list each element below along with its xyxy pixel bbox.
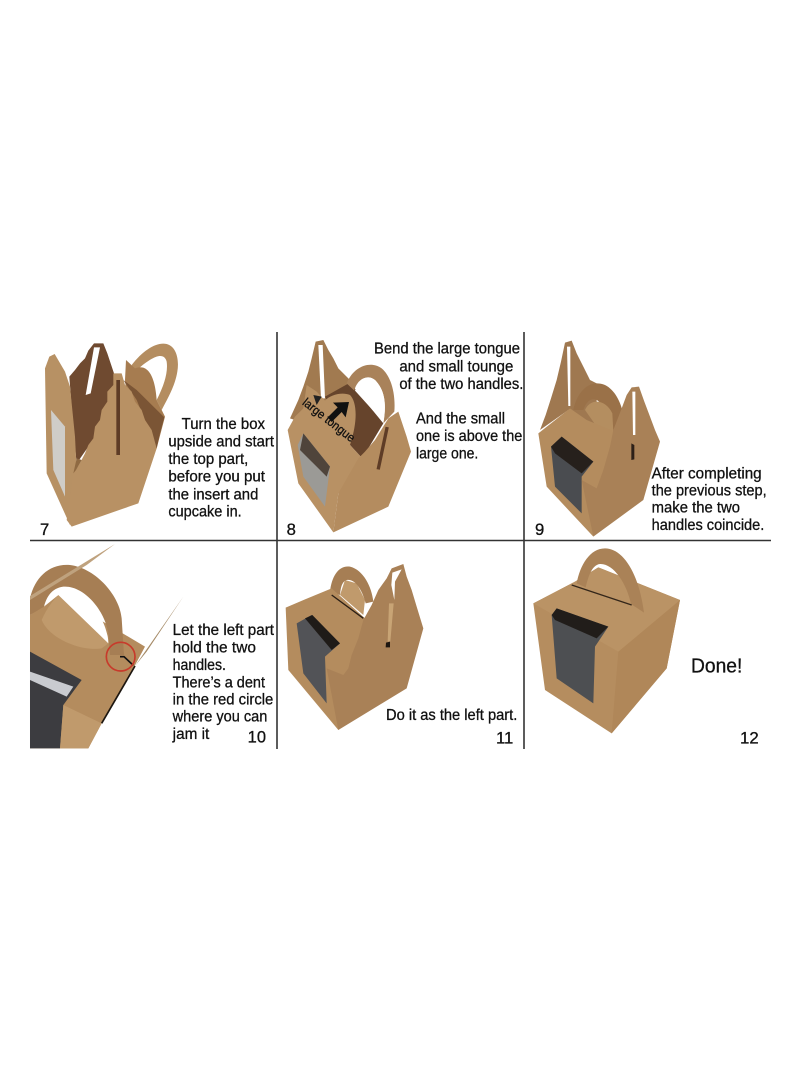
red circle highlighting the dent — [106, 642, 135, 671]
box illustration: step 8 — [288, 340, 411, 532]
box illustration: step 12 — [533, 548, 680, 733]
caption: step 8: one is above the — [416, 428, 523, 445]
caption: step 8: and small tounge — [399, 359, 514, 376]
label: large tongue: large tongue — [300, 395, 358, 445]
caption: step 7: Turn the box — [182, 416, 265, 433]
step number 7: 7 — [40, 520, 49, 539]
panel: step 8 — [287, 340, 523, 539]
box illustration: step 9 — [538, 341, 660, 537]
caption: step 9: the previous step, — [652, 483, 767, 500]
caption: step 10: handles. — [173, 657, 226, 674]
step number 11: 11 — [496, 728, 513, 747]
step number 10: 10 — [248, 728, 266, 747]
caption: step 8: Bend the large tongue — [374, 340, 520, 357]
step number 9: 9 — [535, 520, 544, 539]
box illustration: step 11 — [286, 564, 423, 730]
caption: step 10: jam it — [172, 726, 210, 743]
caption: step 7 — [168, 416, 275, 521]
caption: step 7: the top part, — [168, 451, 248, 468]
caption: step 9: After completing — [652, 465, 762, 482]
step number 8: 8 — [287, 520, 296, 539]
caption: step 10: where you can — [172, 709, 267, 726]
caption: step 8 — [374, 340, 523, 462]
box illustration: step 7 — [45, 343, 178, 527]
step number 12: 12 — [740, 728, 759, 747]
caption: step 7: cupcake in. — [168, 504, 242, 521]
caption: step 10: in the red circle — [173, 691, 274, 708]
caption: step 7: before you put — [168, 469, 266, 486]
panel: step 7 — [40, 343, 275, 539]
caption: step 8: And the small — [416, 410, 505, 427]
caption: step 10 — [172, 622, 275, 743]
caption: done: Done! — [691, 654, 742, 677]
panel: step 10 — [30, 544, 275, 748]
caption: step 10: There’s a dent — [173, 674, 266, 691]
caption: step 10: hold the two — [173, 639, 256, 656]
caption: step 11: Do it as the left part. — [386, 707, 517, 724]
caption: step 9 — [652, 465, 767, 534]
box illustration: step 10 — [30, 544, 183, 748]
caption: step 9: handles coincide. — [652, 517, 764, 534]
caption: step 7: upside and start — [168, 434, 275, 451]
panel: step 9 — [535, 341, 767, 539]
caption: step 9: make the two — [652, 500, 740, 517]
caption: step 10: Let the left part — [173, 622, 275, 639]
caption: step 8: large one. — [416, 445, 478, 462]
caption: step 7: the insert and — [168, 486, 258, 503]
caption: step 8: of the two handles. — [399, 376, 523, 393]
panel: step 11 — [286, 564, 517, 747]
panel: step 12 — [533, 548, 759, 747]
